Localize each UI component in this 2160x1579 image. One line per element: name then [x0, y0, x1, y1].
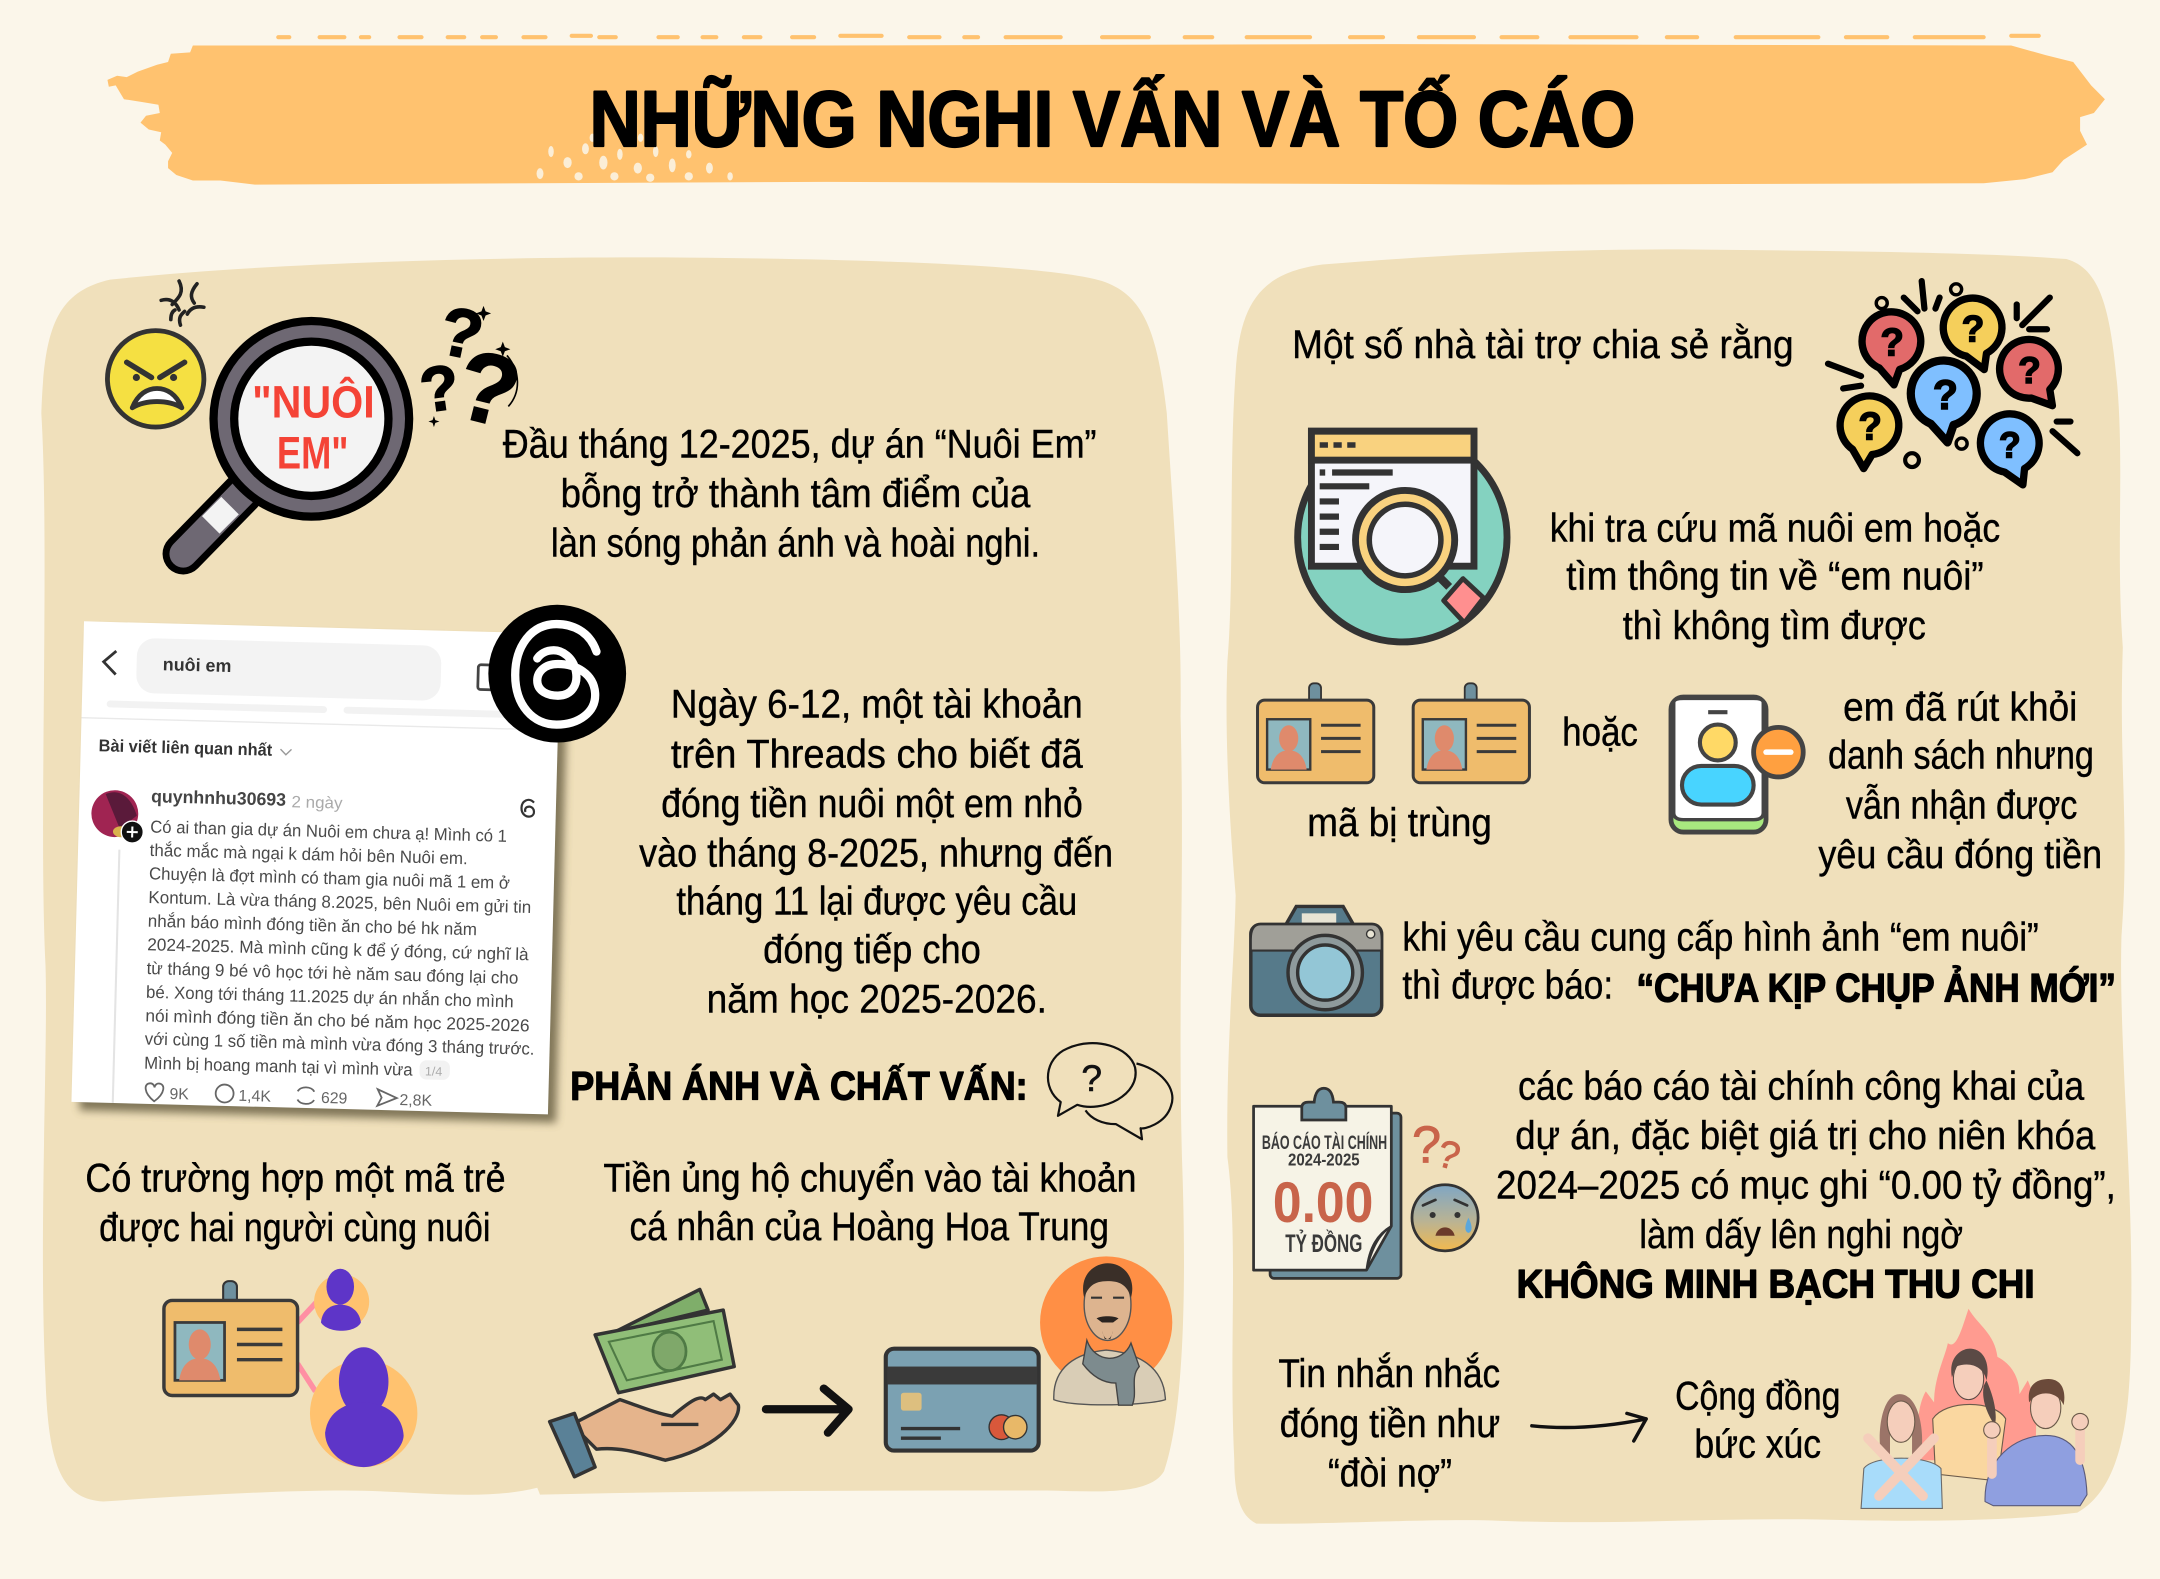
icon: chat bubbles: [1048, 1043, 1172, 1139]
text: lookup fails: tìm thông tin về “em nuôi”: [1566, 555, 1984, 599]
screenshot: Threads post: từ tháng 9 bé vô học tới hè năm sau đóng lại cho: [146, 958, 519, 988]
text: reminder messages: “đòi nợ”: [1328, 1451, 1452, 1495]
screenshot: Threads post: Bài viết liên quan nhất: [98, 735, 273, 760]
icon: magnifier with Nuôi Em: [183, 321, 409, 554]
text: reminder messages: đóng tiền như: [1280, 1402, 1500, 1446]
icon: question marks: [416, 291, 531, 451]
icon: chat bubbles: ?: [1081, 1057, 1102, 1099]
arrow: reminder to outrage: [1532, 1413, 1646, 1441]
title banner: [107, 36, 2105, 185]
text: withdrawn but billed: yêu cầu đóng tiền: [1818, 833, 2102, 877]
text: personal account: cá nhân của Hoàng Hoa Trung: [630, 1205, 1109, 1249]
screenshot: Threads post: 2024-2025. Mà mình cũng k để ý đóng, cứ nghĩ là: [147, 934, 529, 964]
icon: question speech bubbles: ?: [1999, 425, 2021, 465]
arrow: money to card: [766, 1389, 849, 1433]
text: one code two sponsors: được hai người cùng nuôi: [99, 1206, 490, 1250]
icon: angry face: [107, 281, 204, 427]
text: Threads account report: [639, 683, 1113, 1022]
icon: Threads logo: [488, 605, 626, 743]
screenshot: Threads post: quynhnhu30693: [151, 786, 286, 810]
text: Threads account report: đóng tiền nuôi một em nhỏ: [661, 782, 1083, 826]
text: Threads account report: trên Threads cho biết đã: [671, 732, 1083, 776]
icon: search window: [1298, 431, 1507, 642]
text: photo request: khi yêu cầu cung cấp hình ảnh “em nuôi”: [1402, 916, 2039, 960]
text: financial reports: các báo cáo tài chính công khai của: [1518, 1064, 2085, 1108]
icon: question marks: ?: [445, 328, 531, 451]
panel: right: [1227, 249, 2131, 1524]
text: lookup fails: thì không tìm được: [1623, 604, 1926, 648]
text: withdrawn but billed: danh sách nhưng: [1828, 734, 2094, 778]
icon: question marks: ?: [416, 352, 464, 427]
text: intro: bỗng trở thành tâm điểm của: [561, 471, 1031, 516]
text: one code two sponsors: [85, 1157, 506, 1250]
screenshot: Threads post: 2,8K: [399, 1092, 433, 1110]
screenshot: Threads post: Chuyện là đợt mình có tham gia nuôi mã 1 em ở: [149, 863, 510, 893]
icon: question speech bubbles: ?: [1933, 372, 1958, 418]
screenshot: Threads post: Có ai than gia dự án Nuôi em chưa ạ! Mình có 1: [150, 816, 507, 846]
screenshot: Threads post: thắc mắc mà ngại k dám hỏi bên Nuôi em.: [149, 840, 468, 868]
screenshot: Threads post: 9K: [169, 1086, 189, 1103]
text: Threads account report: năm học 2025-2026.: [707, 978, 1047, 1022]
title: NHỮNG NGHI VẤN VÀ TỐ CÁO: [590, 75, 1635, 163]
heading: complaints: PHẢN ÁNH VÀ CHẤT VẤN:: [570, 1062, 1028, 1108]
text: community upset: Cộng đồng: [1675, 1374, 1840, 1418]
screenshot: Threads post: nói mình đóng tiền ăn cho bé năm học 2025-2026: [145, 1005, 530, 1035]
screenshot: Threads post: Kontum. Là vừa tháng 8.2025, bên Nuôi em gửi tin: [148, 887, 532, 917]
text: some sponsors say: Một số nhà tài trợ chia sẻ rằng: [1292, 322, 1794, 367]
text: lookup fails: [1550, 506, 2000, 648]
screenshot: Threads post: với cùng 1 số tiền mà mình vừa đóng 3 tháng trước.: [144, 1029, 535, 1059]
text: photo request: thì được báo:: [1402, 964, 1613, 1008]
icon: worried face with question marks: ?: [1412, 1117, 1441, 1175]
icon: question speech bubbles: [1828, 281, 2077, 491]
text: Threads account report: đóng tiếp cho: [763, 928, 981, 972]
icon: duplicate ID cards: [1258, 683, 1529, 783]
icon: financial report clipboard: [1254, 1088, 1401, 1278]
icon: financial report clipboard: BÁO CÁO TÀI CHÍNH: [1262, 1132, 1387, 1154]
portrait: Hoàng Hoa Trung: [1040, 1256, 1172, 1405]
text: withdrawn but billed: [1818, 685, 2102, 877]
text: intro: Đầu tháng 12-2025, dự án “Nuôi Em”: [503, 422, 1097, 466]
icon: question speech bubbles: ?: [2018, 349, 2041, 391]
icon: ID card shared by two people: [164, 1269, 417, 1467]
screenshot: Threads post: 1/4: [425, 1064, 443, 1079]
text: financial reports: dự án, đặc biệt giá trị cho niên khóa: [1515, 1114, 2096, 1158]
text: community upset: [1675, 1374, 1840, 1466]
text: reminder messages: [1278, 1351, 1500, 1495]
text: withdrawn but billed: em đã rút khỏi: [1843, 685, 2077, 729]
icon: money in hand: [550, 1289, 739, 1477]
screenshot: Threads post: nhắn báo mình đóng tiền ăn cho bé hk năm: [148, 911, 477, 939]
icon: phone removed member: [1671, 697, 1803, 832]
icon: question speech bubbles: ?: [1858, 405, 1882, 448]
icon: magnifier with Nuôi Em: EM": [277, 427, 349, 478]
text: Threads account report: vào tháng 8-2025, nhưng đến: [639, 832, 1113, 876]
text: duplicate code: mã bị trùng: [1307, 801, 1492, 845]
illustration: angry community: [1861, 1309, 2088, 1508]
text: reminder messages: Tin nhắn nhắc: [1278, 1351, 1500, 1396]
screenshot: Threads post: [71, 621, 569, 1123]
screenshot: Threads post: 1,4K: [238, 1088, 272, 1106]
icon: financial report clipboard: 0.00: [1273, 1171, 1373, 1235]
text: financial reports: KHÔNG MINH BẠCH THU CHI: [1517, 1261, 2035, 1307]
text: financial reports: 2024–2025 có mục ghi “0.00 tỷ đồng”,: [1496, 1163, 2116, 1207]
screenshot: Threads post: Mình bị hoang manh tại vì mình vừa: [144, 1053, 413, 1080]
text: personal account: [603, 1157, 1136, 1249]
text: or: hoặc: [1562, 710, 1638, 754]
text: financial reports: làm dấy lên nghi ngờ: [1639, 1213, 1963, 1257]
text: one code two sponsors: Có trường hợp một mã trẻ: [85, 1157, 506, 1201]
screenshot: Threads post: bé. Xong tới tháng 11.2025 dự án nhắn cho mình: [146, 982, 514, 1011]
icon: question speech bubbles: ?: [1880, 321, 1904, 364]
icon: bank card: [886, 1349, 1039, 1451]
icon: camera: [1251, 906, 1382, 1015]
text: Threads account report: Ngày 6-12, một tài khoản: [671, 683, 1083, 727]
text: intro: [503, 422, 1097, 566]
panel: left: [41, 257, 1184, 1502]
icon: magnifier with Nuôi Em: "NUÔI: [252, 375, 375, 427]
text: community upset: bức xúc: [1694, 1422, 1821, 1466]
screenshot: Threads post: 2 ngày: [291, 792, 343, 813]
text: withdrawn but billed: vẫn nhận được: [1846, 782, 2077, 827]
icon: worried face with question marks: ?: [1433, 1132, 1464, 1179]
icon: financial report clipboard: 2024-2025: [1288, 1149, 1360, 1169]
text: lookup fails: khi tra cứu mã nuôi em hoặc: [1550, 506, 2000, 550]
icon: financial report clipboard: TỶ ĐỒNG: [1285, 1229, 1362, 1258]
text: financial reports: [1496, 1064, 2116, 1307]
text: photo request: [1402, 916, 2116, 1011]
icon: question marks: ?: [433, 291, 490, 375]
text: personal account: Tiền ủng hộ chuyển vào tài khoản: [603, 1157, 1136, 1201]
icon: worried face with question marks: [1412, 1117, 1478, 1251]
screenshot: Threads post: nuôi em: [163, 654, 232, 676]
text: Threads account report: tháng 11 lại được yêu cầu: [676, 880, 1077, 924]
screenshot: Threads post: 629: [321, 1090, 348, 1108]
text: intro: làn sóng phản ánh và hoài nghi.: [551, 522, 1040, 566]
icon: question speech bubbles: ?: [1962, 308, 1984, 350]
